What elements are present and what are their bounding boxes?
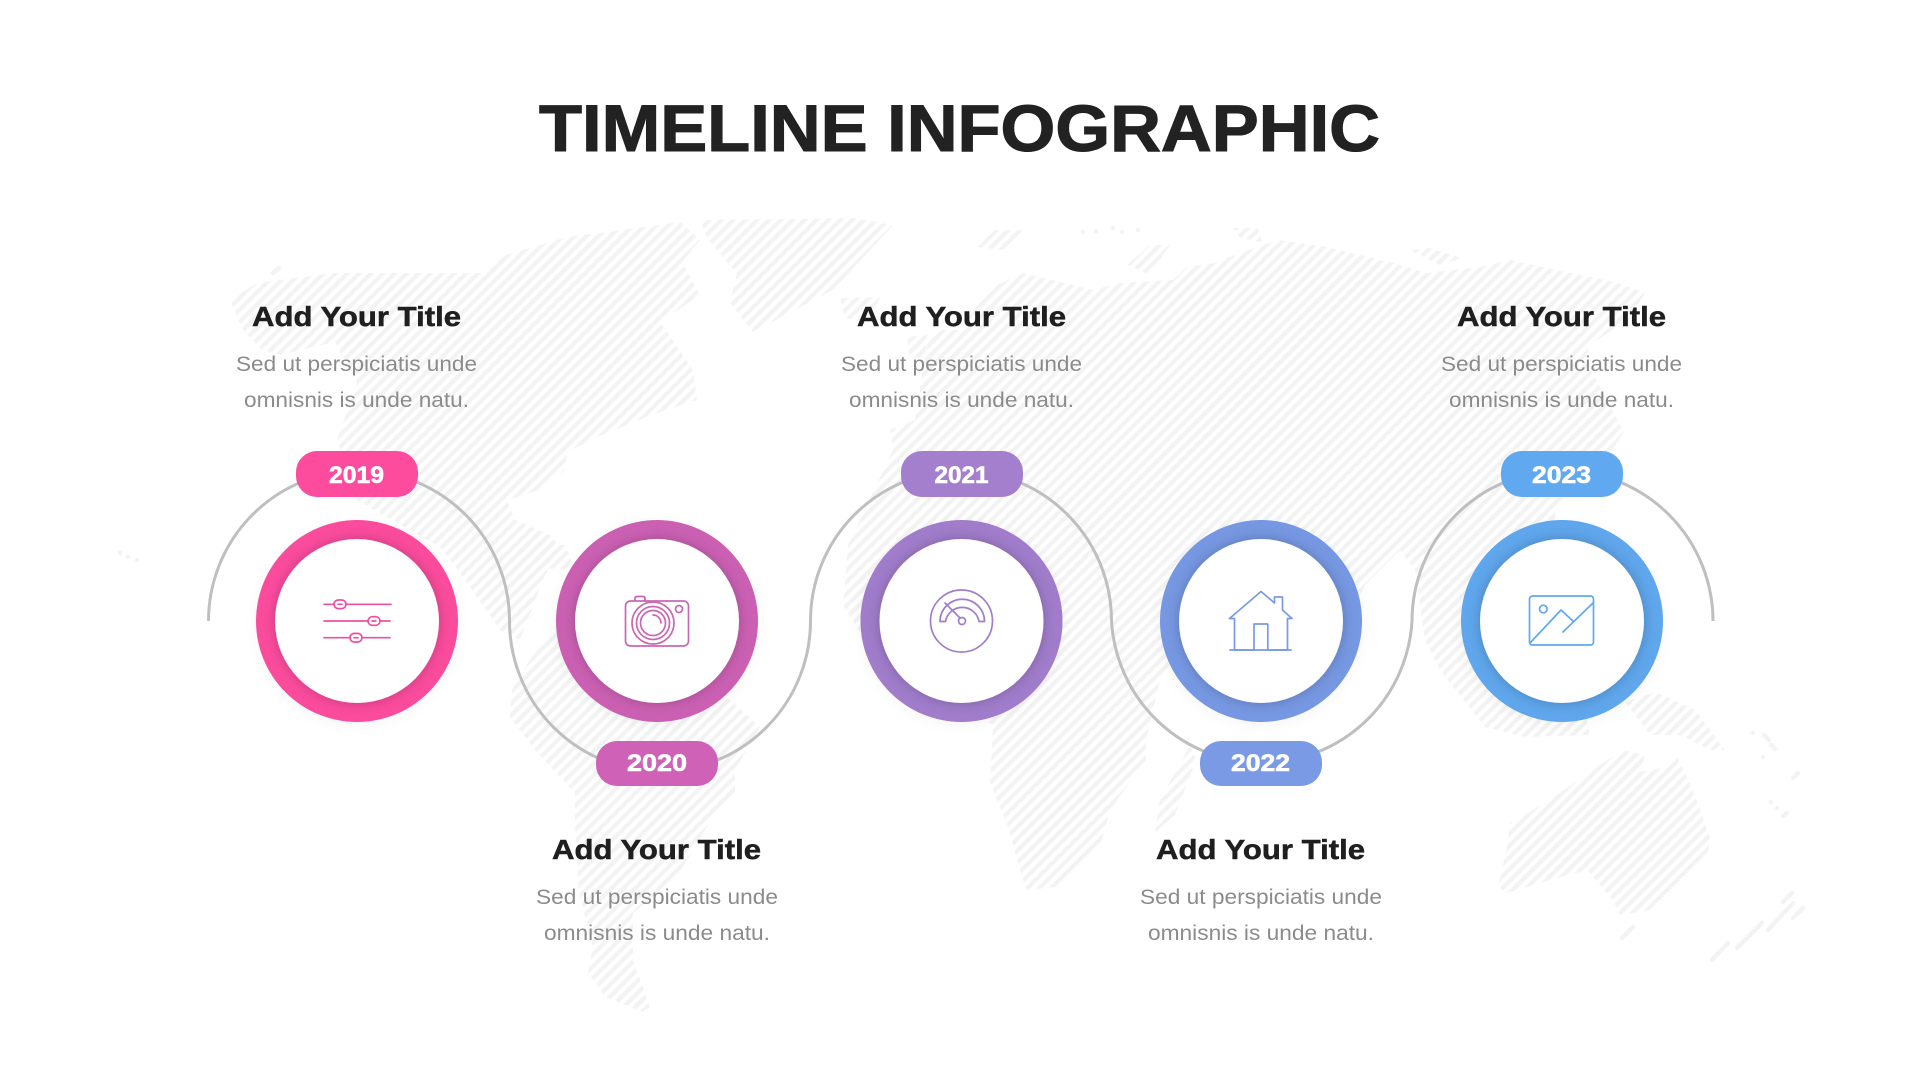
description 2019 xyxy=(236,353,477,412)
year pill 2020: 2020 xyxy=(627,750,687,777)
description 2022: Sed ut perspiciatis unde xyxy=(1140,886,1382,909)
description 2021 xyxy=(841,353,1082,412)
icon: picture xyxy=(1530,596,1594,645)
year pill 2022 xyxy=(1200,741,1322,786)
milestone 2020 xyxy=(536,520,778,945)
milestone 2021 xyxy=(841,301,1082,722)
heading 2023: Add Your Title xyxy=(1457,301,1666,332)
icon: gauge xyxy=(930,590,992,652)
description 2023: Sed ut perspiciatis unde xyxy=(1441,353,1682,376)
world map background xyxy=(120,218,1803,1012)
milestone 2019 xyxy=(236,301,477,722)
year pill 2021 xyxy=(901,451,1023,497)
title: TIMELINE INFOGRAPHIC xyxy=(539,91,1380,165)
description 2020 xyxy=(536,886,778,945)
heading 2020: Add Your Title xyxy=(552,834,761,865)
icon: sliders xyxy=(324,600,391,642)
year pill 2023: 2023 xyxy=(1532,462,1591,489)
milestone 2023 xyxy=(1441,301,1682,722)
ring 2021 xyxy=(860,520,1062,722)
year pill 2019 xyxy=(296,451,418,497)
icon: camera xyxy=(626,596,688,646)
year pill 2019: 2019 xyxy=(329,462,384,489)
ring 2022 xyxy=(1160,520,1362,722)
ring 2023 xyxy=(1461,520,1663,722)
year pill 2021: 2021 xyxy=(934,462,988,489)
ring 2019 xyxy=(256,520,458,722)
description 2023 xyxy=(1441,353,1682,412)
description 2020: omnisnis is unde natu. xyxy=(544,922,770,945)
description 2021: Sed ut perspiciatis unde xyxy=(841,353,1082,376)
description 2020: Sed ut perspiciatis unde xyxy=(536,886,778,909)
heading 2021: Add Your Title xyxy=(857,301,1066,332)
timeline wave connector xyxy=(208,471,1713,771)
description 2023: omnisnis is unde natu. xyxy=(1449,389,1674,412)
milestone 2022 xyxy=(1140,520,1382,945)
year pill 2023 xyxy=(1501,451,1623,497)
heading 2022: Add Your Title xyxy=(1156,834,1365,865)
year pill 2022: 2022 xyxy=(1231,750,1290,777)
description 2021: omnisnis is unde natu. xyxy=(849,389,1074,412)
description 2019: Sed ut perspiciatis unde xyxy=(236,353,477,376)
year pill 2020 xyxy=(596,741,718,786)
icon: house xyxy=(1230,592,1292,650)
ring 2020 xyxy=(556,520,758,722)
description 2022 xyxy=(1140,886,1382,945)
heading 2019: Add Your Title xyxy=(252,301,461,332)
description 2019: omnisnis is unde natu. xyxy=(244,389,469,412)
description 2022: omnisnis is unde natu. xyxy=(1148,922,1374,945)
